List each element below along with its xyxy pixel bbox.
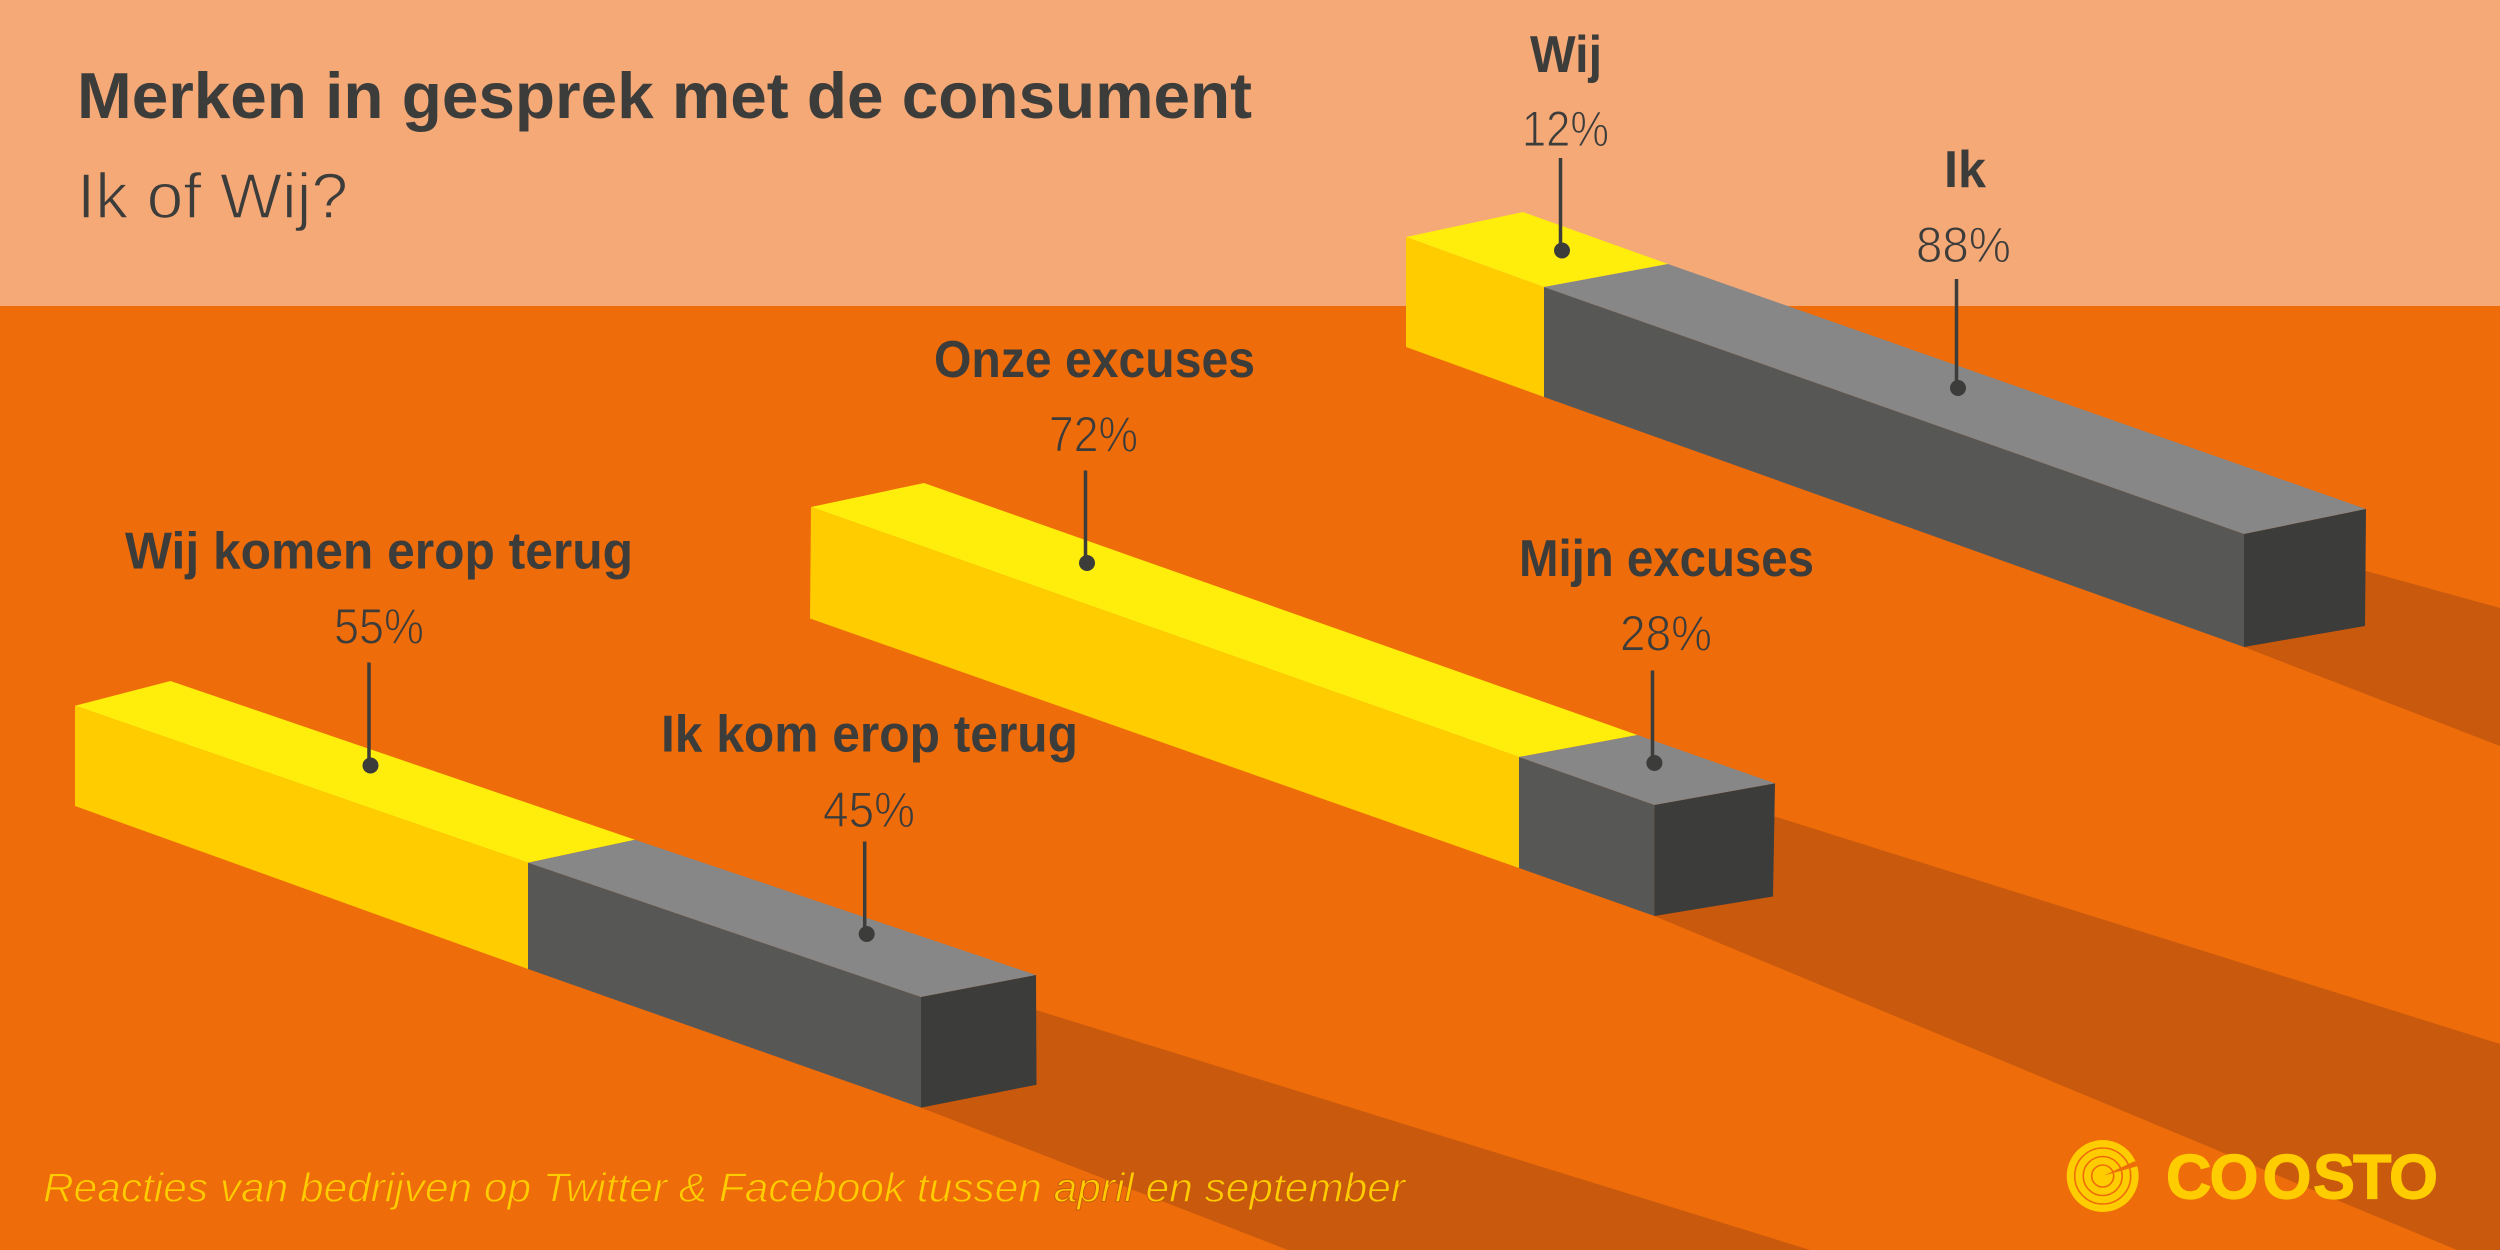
callout: Wij 12% (1522, 26, 1609, 258)
callout: Ik kom erop terug 45%: 45% (823, 782, 915, 838)
footnote: Reacties van bedrijven op Twitter & Facebook tussen april en september (43, 1165, 1407, 1211)
logo: COOSTO (2067, 1140, 2438, 1212)
callout: Mijn excuses 28%: 28% (1620, 606, 1712, 662)
bar chart: Wij 12% / Ik 88% (1406, 212, 2366, 647)
callout: Onze excuses 72%: 72% (1049, 407, 1138, 463)
callout: Mijn excuses 28% (1519, 530, 1814, 771)
callout: Mijn excuses 28%: Mijn excuses (1519, 530, 1814, 588)
callout: Ik kom erop terug 45% (661, 706, 1078, 942)
callout: Ik 88% (1916, 141, 2011, 396)
callout: Wij 12%: Wij (1530, 26, 1602, 84)
header band (0, 0, 2500, 306)
callout: Wij komen erop terug 55% (125, 522, 633, 774)
callout: Onze excuses 72%: Onze excuses (934, 331, 1255, 389)
callout: Wij komen erop terug 55%: 55% (334, 598, 424, 654)
segment: Wij komen erop terug yellow (75, 681, 635, 969)
callout: Wij 12%: 12% (1522, 101, 1609, 157)
segment: Mijn excuses grey (1519, 735, 1775, 916)
bar chart: Onze excuses 72% / Mijn excuses 28% (810, 483, 1775, 916)
callout: Onze excuses 72% (934, 331, 1255, 571)
icon: target (2067, 1140, 2139, 1212)
callout: Ik 88%: 88% (1916, 217, 2011, 273)
segment: Ik kom erop terug grey (528, 840, 1036, 1108)
title: Merken in gesprek met de consument (77, 59, 1252, 132)
callout: Ik kom erop terug 45%: Ik kom erop terug (661, 706, 1078, 764)
shadow: top bar (2244, 571, 2500, 746)
wordmark: COOSTO (2166, 1142, 2438, 1212)
callout: Wij komen erop terug 55%: Wij komen erop terug (125, 522, 633, 580)
shadow: bottom bar (921, 1010, 1810, 1250)
segment: Ik grey (1544, 264, 2366, 647)
bar chart: Wij komen erop terug 55% / Ik kom erop terug 45% (75, 681, 1036, 1108)
shadow: middle bar (1654, 817, 2500, 1250)
subtitle: Ik of Wij? (77, 160, 348, 232)
segment: Wij yellow (1406, 212, 1668, 397)
callout: Ik 88%: Ik (1944, 141, 1986, 199)
segment: Onze excuses yellow (810, 483, 1638, 868)
